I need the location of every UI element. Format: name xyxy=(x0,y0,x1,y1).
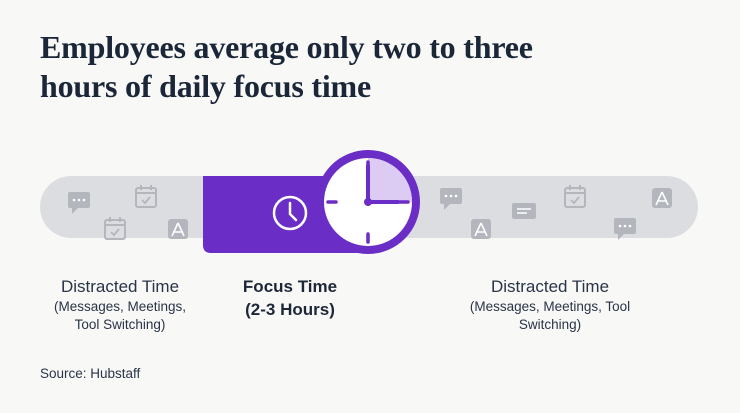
title: hours of daily focus time xyxy=(40,68,371,104)
label: focus time: Focus Time xyxy=(243,277,337,296)
icon: large clock xyxy=(316,150,420,254)
label: distracted time left: Tool Switching) xyxy=(75,317,165,332)
label: distracted time left xyxy=(54,277,186,332)
label: distracted time left: Distracted Time xyxy=(61,277,179,296)
distraction bar xyxy=(40,176,698,240)
title xyxy=(40,29,533,104)
icons: distractions right xyxy=(440,185,672,240)
icons: distractions left xyxy=(68,185,188,239)
timeline graphic xyxy=(40,150,698,254)
label: distracted time right: Distracted Time xyxy=(491,277,609,296)
label: distracted time right: (Messages, Meetings, Tool xyxy=(470,299,630,314)
label: focus time xyxy=(243,277,337,319)
icon: small clock xyxy=(274,197,306,229)
title: Employees average only two to three xyxy=(40,29,533,65)
label: distracted time right xyxy=(470,277,630,332)
source: Source: Hubstaff xyxy=(40,366,140,381)
label: distracted time right: Switching) xyxy=(519,317,581,332)
focus block xyxy=(203,150,420,254)
label: focus time: (2-3 Hours) xyxy=(245,300,335,319)
label: distracted time left: (Messages, Meetings, xyxy=(54,299,186,314)
